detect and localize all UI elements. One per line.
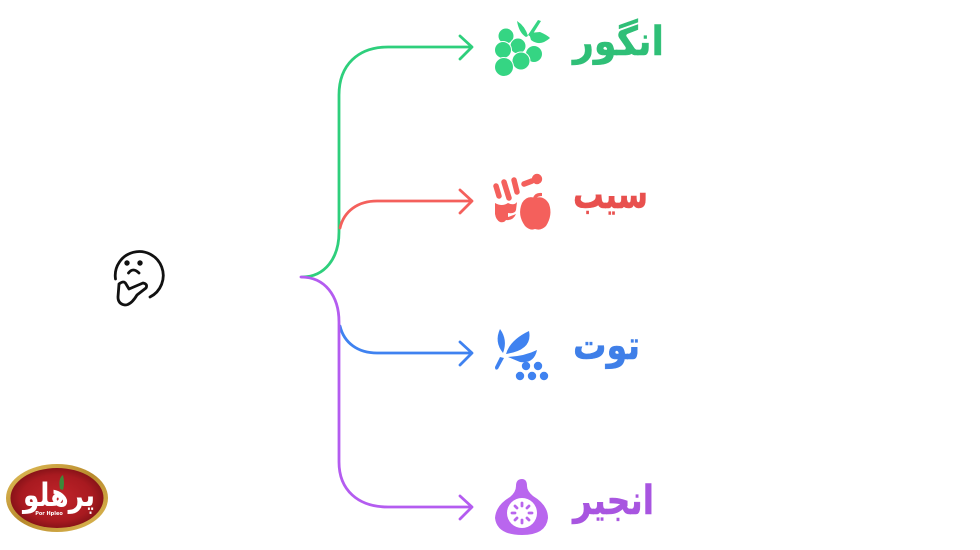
icon: thinking face bbox=[115, 252, 163, 305]
branch: green to grape bbox=[302, 36, 472, 277]
branch: red to apple bbox=[340, 190, 472, 228]
icon: honey dipper and apple bbox=[495, 174, 550, 230]
logo: Por Hpleo oval badge: پرهلو bbox=[21, 476, 95, 514]
icon: mulberry leaves bbox=[495, 329, 548, 380]
label: fig: انجیر bbox=[571, 478, 654, 524]
icon: fig bbox=[495, 479, 548, 535]
logo: Por Hpleo oval badge bbox=[6, 464, 108, 532]
label: mulberry: توت bbox=[573, 323, 640, 369]
logo: Por Hpleo oval badge: Por Hpleo bbox=[35, 511, 63, 517]
label: grape: انگور bbox=[571, 18, 664, 65]
branch: blue to mulberry bbox=[340, 326, 472, 365]
label: apple: سیب bbox=[573, 172, 648, 218]
icon: grapes bbox=[494, 20, 550, 76]
branch: purple to fig bbox=[301, 277, 472, 519]
